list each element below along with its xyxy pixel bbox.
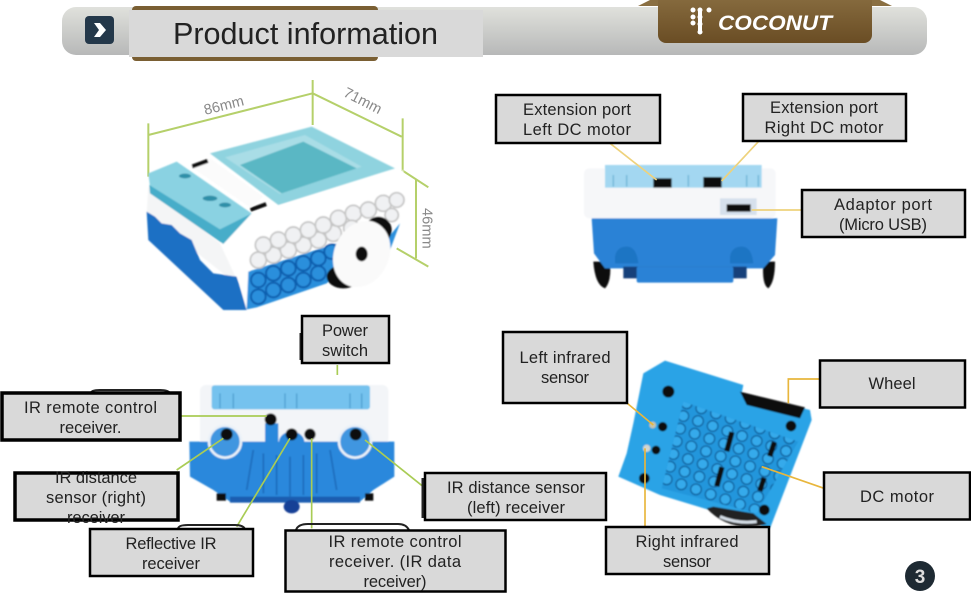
header bar xyxy=(62,0,927,61)
label: Extension port Right DC motor: Extension port xyxy=(770,99,878,117)
label: Extension port Left DC motor: Extension port xyxy=(523,101,631,119)
label: Extension port Left DC motor xyxy=(496,95,660,143)
label: IR remote control data receiver: receiver. (IR data xyxy=(329,553,462,571)
label: Extension port Right DC motor: Right DC motor xyxy=(764,119,884,137)
label: Reflective IR receiver: Reflective IR xyxy=(126,535,217,553)
label: IR remote control receiver: receiver. xyxy=(60,419,122,437)
dimension lines xyxy=(148,80,428,267)
shadow tabs behind labels xyxy=(91,333,423,530)
label: Power switch: switch xyxy=(322,342,368,360)
label: Power switch: Power xyxy=(322,322,368,340)
label: Right infrared sensor xyxy=(606,527,769,574)
label: Wheel xyxy=(820,360,965,408)
page number xyxy=(905,561,935,591)
label: DC motor xyxy=(824,472,970,520)
robot body xyxy=(584,165,777,288)
logo: COCONUT: COCONUT xyxy=(718,12,834,35)
dimension: 86mm: 86mm xyxy=(202,93,246,119)
title: Product information xyxy=(173,16,438,51)
leader lines xyxy=(627,379,824,527)
label: Extension port Left DC motor: Left DC motor xyxy=(523,121,632,139)
leader lines xyxy=(610,142,802,210)
label: IR distance sensor right xyxy=(15,469,178,527)
label: IR distance sensor right: IR distance xyxy=(55,469,137,487)
label: Adaptor port: (Micro USB) xyxy=(839,216,927,234)
label: Wheel: Wheel xyxy=(868,375,916,393)
label: Right infrared sensor: sensor xyxy=(663,553,712,571)
label: Power switch xyxy=(302,316,389,363)
label: IR distance sensor right: receiver xyxy=(67,509,126,527)
label: IR distance sensor left: (left) receiver xyxy=(467,499,566,517)
label: IR distance sensor left xyxy=(425,473,606,520)
label: IR distance sensor right: sensor (right) xyxy=(46,489,146,507)
panel: robot front view xyxy=(177,365,423,528)
leader lines xyxy=(177,365,423,528)
page number: 3 xyxy=(915,567,925,588)
panel: robot rear view xyxy=(584,142,802,288)
label: IR remote control receiver: IR remote control xyxy=(24,399,157,417)
label: Extension port Right DC motor xyxy=(743,94,906,141)
panel: robot with dimensions xyxy=(147,80,435,310)
icon: chevron badge xyxy=(85,16,114,44)
label: Reflective IR receiver xyxy=(90,529,253,576)
label: IR distance sensor left: IR distance sensor xyxy=(447,479,586,497)
title xyxy=(129,10,483,57)
label: IR remote control data receiver: IR remote control xyxy=(328,533,462,551)
label: IR remote control data receiver: receiver) xyxy=(364,573,426,591)
label: Reflective IR receiver: receiver xyxy=(142,555,200,573)
label: Adaptor port xyxy=(802,190,965,237)
robot body xyxy=(147,127,404,310)
label: Right infrared sensor: Right infrared xyxy=(636,533,738,551)
label: Adaptor port: Adaptor port xyxy=(834,196,932,214)
label: Left infrared sensor xyxy=(503,332,627,403)
label: Left infrared sensor: Left infrared xyxy=(520,349,610,367)
robot body xyxy=(618,361,812,528)
label: DC motor: DC motor xyxy=(860,488,934,506)
robot body xyxy=(189,385,394,513)
panel: robot underside xyxy=(618,361,824,528)
dimension: 71mm: 71mm xyxy=(341,85,384,118)
label: IR remote control receiver xyxy=(2,393,180,440)
logo: COCONUT xyxy=(638,0,892,43)
label: IR remote control data receiver xyxy=(286,530,506,592)
brown tab behind title xyxy=(132,6,378,61)
dimension: 46mm: 46mm xyxy=(419,208,435,249)
label: Left infrared sensor: sensor xyxy=(541,369,590,387)
